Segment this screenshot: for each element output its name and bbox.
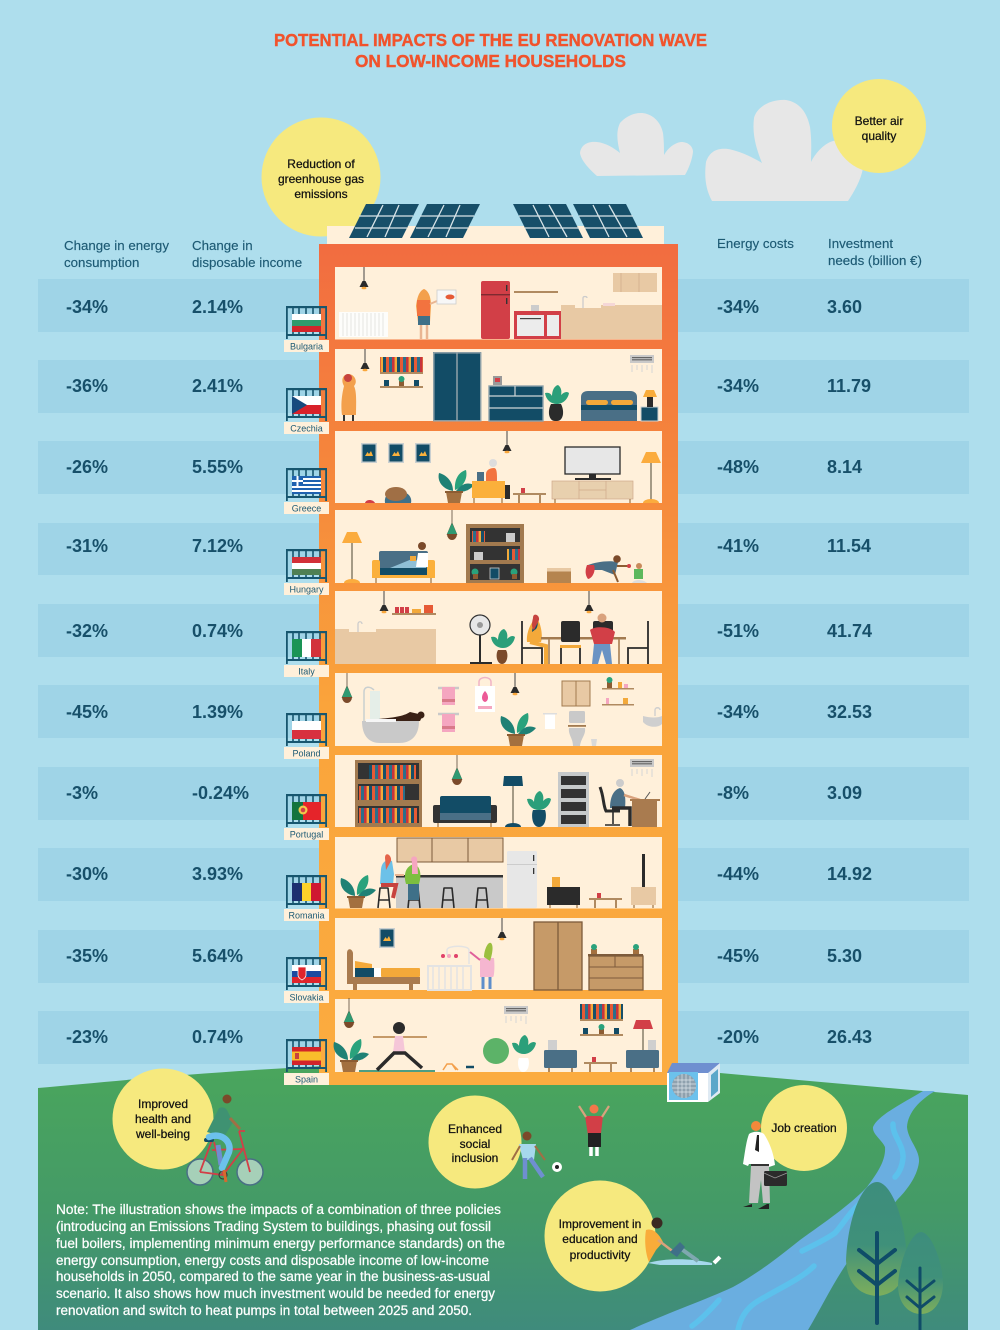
icon: outdoor heat pump unit xyxy=(667,1063,720,1102)
row: Czechia values: -36% xyxy=(66,376,108,396)
flag: Spain: Spain xyxy=(295,1074,318,1084)
flag: Italy xyxy=(284,631,329,677)
icon: child with ball xyxy=(512,1132,562,1179)
icon: cyclist xyxy=(187,1094,263,1185)
room: Slovakia nursery xyxy=(335,918,662,990)
building frame xyxy=(319,244,678,1085)
room: Czechia bedroom xyxy=(335,349,662,421)
note text: renovation and switch to heat pumps in total between 2025 and 2050. xyxy=(56,1303,472,1318)
roof terrace xyxy=(327,226,664,245)
row: Greece values xyxy=(66,457,862,477)
row: Bulgaria values: 3.60 xyxy=(827,297,862,317)
flag: Poland: Poland xyxy=(292,748,321,758)
data row bands xyxy=(38,279,969,1064)
note text: households in 2050, compared to the same year in the business-as-usual xyxy=(56,1269,490,1284)
title: ON LOW-INCOME HOUSEHOLDS xyxy=(355,51,626,71)
column headers: Energy costs xyxy=(717,236,794,251)
row: Czechia values: -34% xyxy=(717,376,759,396)
flag: Italy: Italy xyxy=(298,666,315,676)
solar panels xyxy=(349,204,643,238)
row: Portugal values xyxy=(66,783,862,803)
row: Italy values: 0.74% xyxy=(192,621,243,641)
flag: Poland xyxy=(284,713,329,759)
row: Hungary values: 11.54 xyxy=(827,536,871,556)
callout: education: Improvement in xyxy=(559,1217,641,1231)
callout: social inclusion: inclusion xyxy=(452,1151,498,1165)
callout: health: health and xyxy=(135,1112,191,1126)
row: Greece values: 5.55% xyxy=(192,457,243,477)
row: Italy values xyxy=(66,621,872,641)
cloud: left xyxy=(580,113,693,176)
row: Romania values xyxy=(66,864,872,884)
note text: (introducing an Emissions Trading System to buildings, phasing out fossil xyxy=(56,1219,491,1234)
row: Slovakia values: 5.30 xyxy=(827,946,862,966)
row: Bulgaria values: -34% xyxy=(717,297,759,317)
column headers: Change in energy xyxy=(64,238,169,253)
row: Slovakia values: -35% xyxy=(66,946,108,966)
row: Hungary values: -41% xyxy=(717,536,759,556)
column headers: Change in xyxy=(192,238,253,253)
flag: Slovakia xyxy=(284,957,329,1003)
row: Poland values: -45% xyxy=(66,702,108,722)
row: Spain values: 26.43 xyxy=(827,1027,872,1047)
column headers: Investment xyxy=(828,236,893,251)
icon: child cheering xyxy=(579,1104,609,1156)
river xyxy=(630,1091,935,1330)
note text: Note: The illustration shows the impacts of a combination of three policies xyxy=(56,1202,501,1217)
flag: Romania xyxy=(284,875,329,921)
room: Poland bathroom xyxy=(335,673,662,746)
row: Romania values: -44% xyxy=(717,864,759,884)
row: Italy values: 41.74 xyxy=(827,621,872,641)
column headers: consumption xyxy=(64,255,139,270)
callout: greenhouse gas: emissions xyxy=(294,187,348,201)
row: Greece values: -26% xyxy=(66,457,108,477)
note text: fuel boilers, implementing minimum energy performance standards) on the xyxy=(56,1236,505,1251)
room: Hungary living room xyxy=(335,510,662,583)
row: Czechia values xyxy=(66,376,871,396)
callout: job creation: Job creation xyxy=(771,1121,837,1135)
row: Czechia values: 11.79 xyxy=(827,376,871,396)
building xyxy=(319,204,678,1085)
note text: energy consumption, energy costs and disposable income of low-income xyxy=(56,1253,489,1268)
row: Romania values: -30% xyxy=(66,864,108,884)
flag: Hungary xyxy=(284,549,329,595)
room: Spain gym xyxy=(334,998,662,1072)
row: Poland values: -34% xyxy=(717,702,759,722)
row: Bulgaria values: -34% xyxy=(66,297,108,317)
flag: Czechia xyxy=(284,388,329,434)
flag: Czechia: Czechia xyxy=(290,424,323,434)
row: Bulgaria values xyxy=(66,297,862,317)
flag: Portugal: Portugal xyxy=(290,830,323,840)
callout: social inclusion: Enhanced xyxy=(448,1122,502,1136)
row: Portugal values: -3% xyxy=(66,783,98,803)
row: Poland values: 32.53 xyxy=(827,702,872,722)
callout: health xyxy=(112,1068,214,1170)
callout: education: productivity xyxy=(570,1248,630,1262)
row: Spain values: -23% xyxy=(66,1027,108,1047)
callout: job creation xyxy=(761,1085,847,1171)
flag: Slovakia: Slovakia xyxy=(289,992,324,1002)
row: Romania values: 14.92 xyxy=(827,864,872,884)
title xyxy=(274,30,707,71)
room: Italy dining room xyxy=(335,591,662,664)
column headers: disposable income xyxy=(192,255,302,270)
row: Poland values: 1.39% xyxy=(192,702,243,722)
callout: air quality: Better air xyxy=(855,114,903,128)
cloud: right xyxy=(705,100,863,201)
callout: health: Improved xyxy=(138,1097,188,1111)
row: Italy values: -32% xyxy=(66,621,108,641)
row: Spain values xyxy=(66,1027,872,1047)
callout: social inclusion xyxy=(428,1096,522,1188)
row: Hungary values: -31% xyxy=(66,536,108,556)
note text: scenario. It also shows how much investment would be needed for energy xyxy=(56,1286,495,1301)
room: Bulgaria kitchen xyxy=(335,267,662,340)
callout: greenhouse gas: Reduction of xyxy=(287,157,355,171)
row: Spain values: 0.74% xyxy=(192,1027,243,1047)
room: Portugal study xyxy=(335,755,662,827)
callout: greenhouse gas: greenhouse gas xyxy=(278,172,364,186)
room: Greece living room xyxy=(335,431,662,503)
row: Hungary values: 7.12% xyxy=(192,536,243,556)
flag: Hungary: Hungary xyxy=(289,584,324,594)
row: Czechia values: 2.41% xyxy=(192,376,243,396)
row: Bulgaria values: 2.14% xyxy=(192,297,243,317)
row: Romania values: 3.93% xyxy=(192,864,243,884)
row: Greece values: 8.14 xyxy=(827,457,862,477)
row: Spain values: -20% xyxy=(717,1027,759,1047)
icon: businessman xyxy=(743,1121,787,1209)
tree: large xyxy=(846,1182,907,1323)
ground hill xyxy=(38,1062,968,1330)
callout: air quality: quality xyxy=(862,129,896,143)
flag: Greece: Greece xyxy=(292,504,321,514)
row: Slovakia values xyxy=(66,946,862,966)
flag: Bulgaria xyxy=(284,306,329,352)
callout: education: education and xyxy=(562,1232,638,1246)
row: Poland values xyxy=(66,702,872,722)
callout: health: well-being xyxy=(135,1127,190,1141)
row: Portugal values: -0.24% xyxy=(192,783,249,803)
room: Romania kitchen xyxy=(335,837,662,908)
tree: small xyxy=(898,1232,943,1330)
row: Slovakia values: 5.64% xyxy=(192,946,243,966)
callout: social inclusion: social xyxy=(460,1137,490,1151)
row: Greece values: -48% xyxy=(717,457,759,477)
flag: Greece xyxy=(284,468,329,514)
row: Slovakia values: -45% xyxy=(717,946,759,966)
title: POTENTIAL IMPACTS OF THE EU RENOVATION WAVE xyxy=(274,30,707,50)
column headers xyxy=(64,236,922,270)
flag: Romania: Romania xyxy=(288,910,325,920)
row: Portugal values: 3.09 xyxy=(827,783,862,803)
icon: person reading xyxy=(645,1218,720,1265)
flag: Bulgaria: Bulgaria xyxy=(290,342,323,352)
row: Italy values: -51% xyxy=(717,621,759,641)
callout: education xyxy=(544,1180,656,1292)
callout: air quality xyxy=(832,79,926,173)
note text xyxy=(56,1202,505,1318)
callout: greenhouse gas xyxy=(262,118,380,236)
row: Hungary values xyxy=(66,536,871,556)
flag: Portugal xyxy=(284,794,329,840)
row: Portugal values: -8% xyxy=(717,783,749,803)
country balconies and flags xyxy=(284,306,329,1085)
flag: Spain xyxy=(284,1039,329,1085)
column headers: needs (billion €) xyxy=(828,253,922,268)
